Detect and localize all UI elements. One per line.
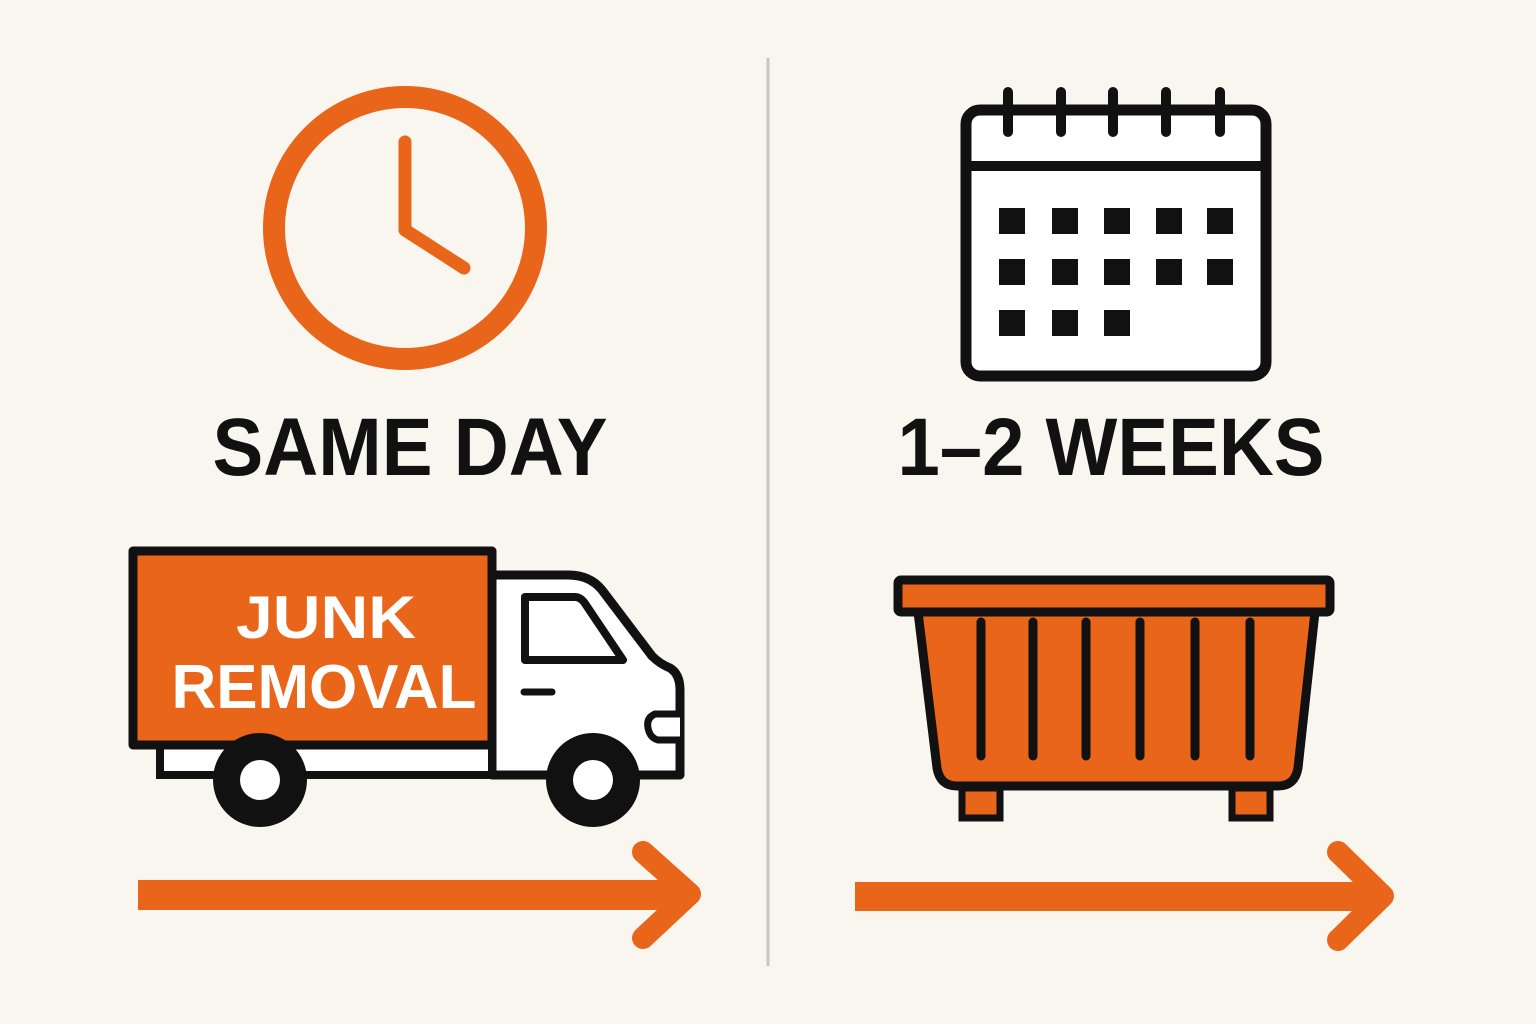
heading: same day: SAME DAY xyxy=(212,402,608,493)
icon: junk removal truck: REMOVAL xyxy=(172,653,476,722)
icon: dumpster xyxy=(898,580,1330,818)
truck label: JUNK xyxy=(236,584,416,651)
arrow: left xyxy=(138,852,690,938)
icon: calendar xyxy=(966,92,1266,376)
icon: clock xyxy=(274,97,536,359)
heading: 1-2 weeks: 1–2 WEEKS xyxy=(898,402,1324,493)
icon: junk removal truck xyxy=(133,551,680,827)
arrow: right xyxy=(855,852,1383,940)
